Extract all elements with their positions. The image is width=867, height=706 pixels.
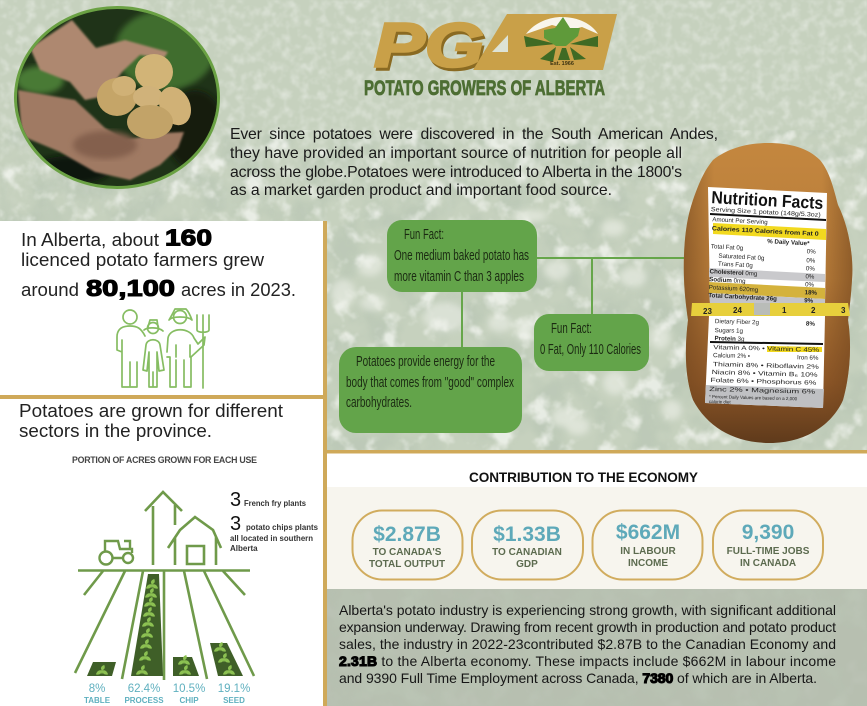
nutrition facts label: Serving Size 1 potato (148g/5.3oz): [711, 206, 821, 219]
photo: hands holding potatoes: [14, 6, 220, 189]
stat: GDP: [472, 510, 583, 580]
logo letters: PG: [374, 10, 484, 80]
logo letters shadow: PG: [376, 13, 486, 83]
stat: labour income: [592, 510, 702, 580]
panel: economy paragraph: Alberta's potato industry is experiencing strong growth, with significant additional: [339, 602, 836, 618]
processing plants note: Alberta: [230, 544, 258, 553]
nutrition facts label: Trans Fat 0g: [718, 261, 754, 269]
chart labels: CHIP: [179, 696, 199, 705]
nutrition facts label: Thiamin 8% • Riboflavin 2%: [713, 361, 820, 371]
logo emblem: [524, 17, 600, 67]
fun fact: energy: Potatoes provide energy for the: [356, 353, 495, 370]
nutrition facts label: Protein 3g: [714, 335, 745, 343]
nutrition facts label: Total Carbohydrate 26g: [708, 292, 777, 303]
plot: table: [87, 662, 116, 676]
farmer statistic text: acres in 2023.: [181, 280, 296, 300]
fun fact: calories: Fun Fact:: [551, 320, 592, 337]
icon: tractor: [100, 541, 133, 564]
field lines: [75, 570, 254, 680]
processing plants note: 3: [230, 513, 241, 535]
panel: contribution to the economy: [327, 450, 867, 589]
chart heading: PORTION OF ACRES GROWN FOR EACH USE: [72, 455, 257, 465]
nutrition facts label: calorie diet: [709, 399, 731, 405]
processing plants note: 3: [230, 489, 241, 511]
panel: economy paragraph: sales, the industry in 2022-23contributed $2.87B to the Canadian Economy and: [339, 636, 836, 652]
panel: farmers and sectors (white): [0, 221, 327, 706]
stat: labour income: $662M: [616, 521, 680, 544]
intro text: Ever since potatoes were discovered in the South American Andes,: [230, 126, 718, 143]
nutrition facts label: Cholesterol 0mg: [709, 268, 758, 278]
measuring tape: 23: [703, 307, 712, 316]
nutrition facts label: Zinc 2% • Magnesium 6%: [709, 386, 816, 396]
fun fact: calories: 0 Fat, Only 110 Calories: [540, 341, 641, 358]
nutrition facts label: 0%: [806, 265, 815, 273]
processing plants note: [230, 489, 319, 553]
stat: jobs: [713, 510, 823, 580]
stat: jobs: FULL-TIME JOBS: [727, 546, 810, 557]
intro text: [230, 126, 718, 199]
potato with nutrition label: [684, 143, 852, 443]
farmer statistic text: In Alberta, about: [21, 230, 159, 250]
sectors intro text: sectors in the province.: [19, 421, 212, 441]
chart: field rows pictogram: [75, 492, 254, 680]
panel: economy paragraph: expansion underway. Drawing from recent growth in production and potato product: [339, 619, 836, 635]
chart labels: PROCESS: [124, 696, 164, 705]
panel: economy paragraph: and 9390 Full Time Employment across Canada, 7380 of which are in Alberta.: [339, 670, 817, 686]
logo emblem: Est. 1966: [550, 61, 574, 67]
panel: economy paragraph: 2.31B to the Alberta economy. These impacts include $662M in labour income: [339, 653, 836, 669]
nutrition facts label: % Daily Value*: [767, 238, 810, 247]
nutrition facts label: Folate 6% • Phosphorus 6%: [710, 377, 817, 387]
processing plants note: potato chips plants: [246, 523, 319, 532]
chart labels: SEED: [223, 696, 245, 705]
fun fact: vitamin C: [387, 220, 537, 292]
background: potato field in bloom: [0, 0, 867, 450]
stat: jobs: IN CANADA: [740, 558, 796, 569]
organisation name: POTATO GROWERS OF ALBERTA: [364, 77, 605, 100]
processing plants note: all located in southern: [230, 534, 313, 543]
stat: jobs: 9,390: [742, 521, 794, 544]
intro text: across the globe.Potatoes were introduced to Alberta in the 1800's: [230, 164, 682, 181]
farmer statistic text: licenced potato farmers grew: [21, 250, 265, 270]
stat: labour income: INCOME: [628, 558, 668, 569]
chart labels: TABLE: [84, 696, 111, 705]
measuring tape: 1: [782, 306, 787, 315]
intro text: as a market garden product and important food source.: [230, 182, 612, 199]
plot: process: [131, 574, 163, 676]
measuring tape: [691, 303, 850, 316]
nutrition facts label: Total Fat 0g: [711, 243, 744, 252]
nutrition facts label: Saturated Fat 0g: [718, 253, 765, 262]
farmer statistic text: around: [21, 280, 79, 300]
fun fact: vitamin C: Fun Fact:: [404, 226, 444, 243]
fun fact: calories: [534, 314, 649, 371]
potato side shading: [684, 143, 852, 443]
farmer statistic text: 160: [165, 224, 212, 250]
nutrition facts label: Dietary Fiber 2g: [715, 318, 760, 326]
plot: chip: [173, 656, 199, 676]
logo A notch: [492, 35, 508, 52]
chart labels: 8%: [89, 683, 105, 695]
stat: GDP: TO CANADIAN: [492, 547, 562, 558]
nutrition facts label: 0%: [807, 248, 816, 256]
measuring tape: 3: [841, 306, 846, 315]
potato body: [684, 143, 852, 443]
fun fact: vitamin C: more vitamin C than 3 apples: [394, 268, 524, 285]
nutrition facts label: * Percent Daily Values are based on a 2,000: [709, 394, 798, 401]
farmer statistic text: [21, 224, 296, 301]
stat: labour income: IN LABOUR: [620, 546, 677, 557]
stat: total output: $2.87B: [373, 523, 441, 546]
stat: total output: TOTAL OUTPUT: [369, 559, 445, 570]
fun fact: energy: body that comes from "good" complex: [346, 374, 514, 391]
farmer statistic text: 80,100: [86, 275, 175, 301]
processing plants note: French fry plants: [244, 499, 307, 508]
logo: PGA: [364, 10, 617, 100]
nutrition facts label: 18%: [804, 289, 818, 297]
nutrition facts label: Vitamin A 0% • Vitamin C 45%: [713, 344, 820, 354]
chart labels: 10.5%: [173, 683, 205, 695]
nutrition facts label: [705, 187, 827, 408]
intro text: they have provided an important source of nutrition for people all: [230, 145, 682, 162]
fun fact: energy: carbohydrates.: [346, 394, 412, 411]
plot: seed: [210, 642, 243, 676]
nutrition facts label: Sugars 1g: [715, 327, 744, 335]
nutrition facts label: Amount Per Serving: [712, 216, 768, 226]
icon: farmer family: [117, 309, 209, 388]
chart labels: 19.1%: [218, 683, 250, 695]
stat: GDP: $1.33B: [493, 523, 561, 546]
nutrition facts label: 9%: [804, 297, 814, 305]
nutrition facts label: 0%: [806, 257, 816, 265]
chart labels: [84, 683, 250, 705]
panel: economy paragraph: [327, 589, 867, 706]
icon: silo: [145, 492, 182, 565]
fun fact: vitamin C: One medium baked potato has: [394, 247, 529, 264]
stat: GDP: GDP: [516, 559, 538, 570]
sectors intro text: [19, 401, 283, 441]
logo band with letter A: [473, 14, 617, 70]
sectors intro text: Potatoes are grown for different: [19, 401, 283, 421]
nutrition facts label: Potassium 620mg: [709, 284, 759, 294]
nutrition facts label: 8%: [806, 321, 815, 328]
heading: CONTRIBUTION TO THE ECONOMY: [469, 470, 698, 485]
fun fact: energy: [339, 347, 522, 433]
stat: total output: TO CANADA'S: [373, 547, 442, 558]
nutrition facts label: Nutrition Facts: [711, 187, 824, 213]
measuring tape: 24: [733, 306, 742, 315]
nutrition facts label: Sodium 0mg: [709, 276, 746, 285]
nutrition facts label: Calcium 2% •: [713, 352, 750, 360]
nutrition facts label: 0%: [805, 273, 815, 281]
measuring tape: 2: [811, 306, 816, 315]
connector lines: [462, 258, 690, 348]
icon: barn: [168, 517, 221, 565]
nutrition facts label: Calories 110 Calories from Fat 0: [712, 225, 819, 238]
stat: total output: [352, 510, 462, 580]
chart labels: 62.4%: [128, 683, 160, 695]
nutrition facts label: Niacin 8% • Vitamin B₆ 10%: [712, 369, 818, 379]
nutrition facts label: Iron 6%: [797, 354, 819, 362]
nutrition facts label: 0%: [805, 281, 815, 289]
